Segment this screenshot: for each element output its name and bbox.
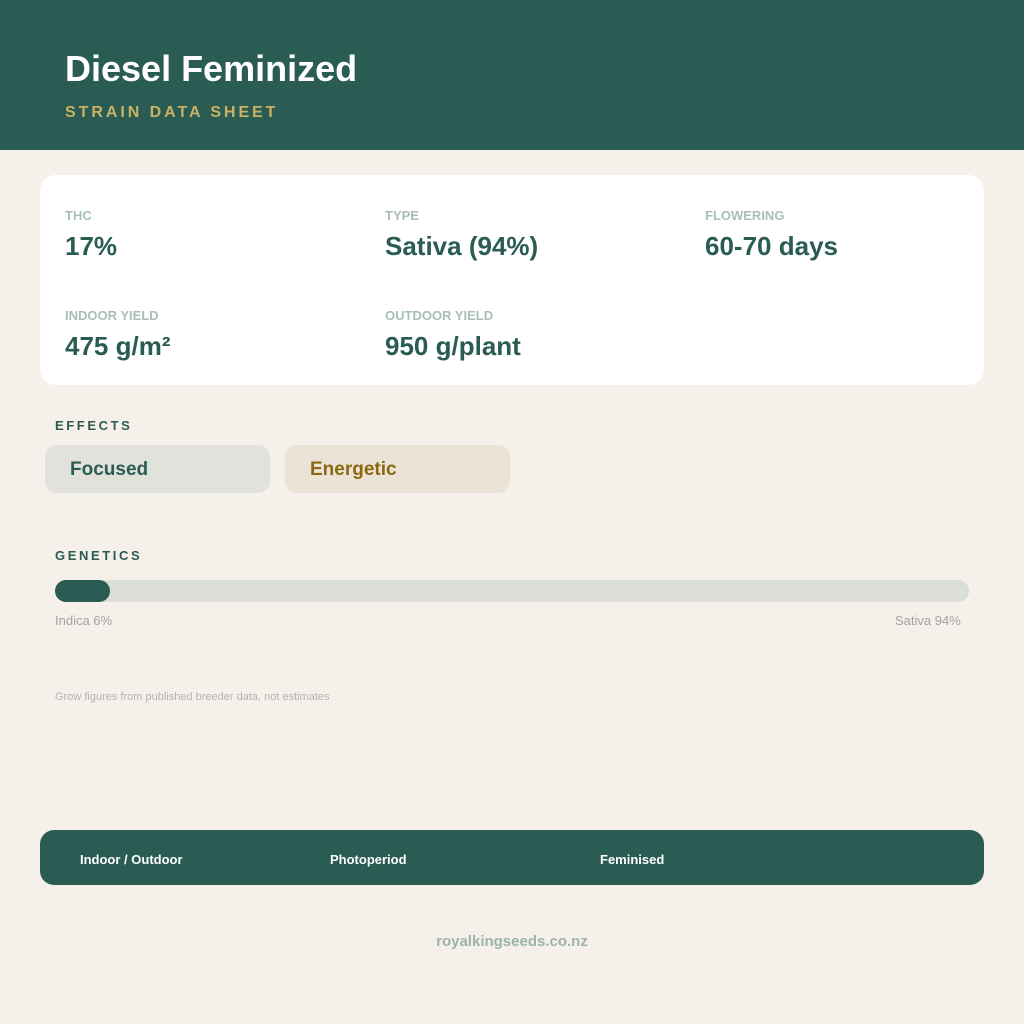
indica share	[55, 580, 110, 602]
effect tag: energetic: Energetic	[310, 459, 397, 480]
heading: effects: EFFECTS	[55, 418, 132, 433]
effect tag: focused	[45, 445, 270, 493]
subtitle: STRAIN DATA SHEET	[65, 104, 278, 121]
effect tag: focused: Focused	[70, 459, 148, 480]
stat: outdoor yield	[385, 308, 521, 361]
stat: indoor yield	[65, 308, 170, 361]
label: indica: Indica 6%	[55, 613, 112, 628]
stat: indoor yield: INDOOR YIELD	[65, 308, 159, 323]
stat: THC: THC	[65, 208, 92, 223]
header banner	[0, 0, 1024, 150]
tag: photoperiod: Photoperiod	[330, 852, 407, 867]
panel: strain stats	[40, 175, 984, 385]
stat: outdoor yield: OUTDOOR YIELD	[385, 308, 493, 323]
label: sativa: Sativa 94%	[895, 613, 961, 628]
genetics bar	[55, 580, 969, 602]
stat: THC	[65, 208, 117, 261]
stat: outdoor yield: 950 g/plant	[385, 331, 521, 361]
title: Diesel Feminized	[65, 48, 357, 89]
stat: type	[385, 208, 538, 261]
tag: indoor outdoor: Indoor / Outdoor	[80, 852, 183, 867]
effect tag: energetic	[285, 445, 510, 493]
stat: type: TYPE	[385, 208, 419, 223]
website: royalkingseeds.co.nz	[436, 933, 588, 950]
stat: THC: 17%	[65, 231, 117, 261]
heading: genetics: GENETICS	[55, 548, 142, 563]
tag: feminised: Feminised	[600, 852, 664, 867]
stat: type: Sativa (94%)	[385, 231, 538, 261]
footer bar	[40, 830, 984, 885]
stat: flowering: FLOWERING	[705, 208, 784, 223]
stat: flowering	[705, 208, 838, 261]
source note: Grow figures from published breeder data, not estimates	[55, 691, 330, 703]
stat: flowering: 60-70 days	[705, 231, 838, 261]
stat: indoor yield: 475 g/m²	[65, 331, 170, 361]
